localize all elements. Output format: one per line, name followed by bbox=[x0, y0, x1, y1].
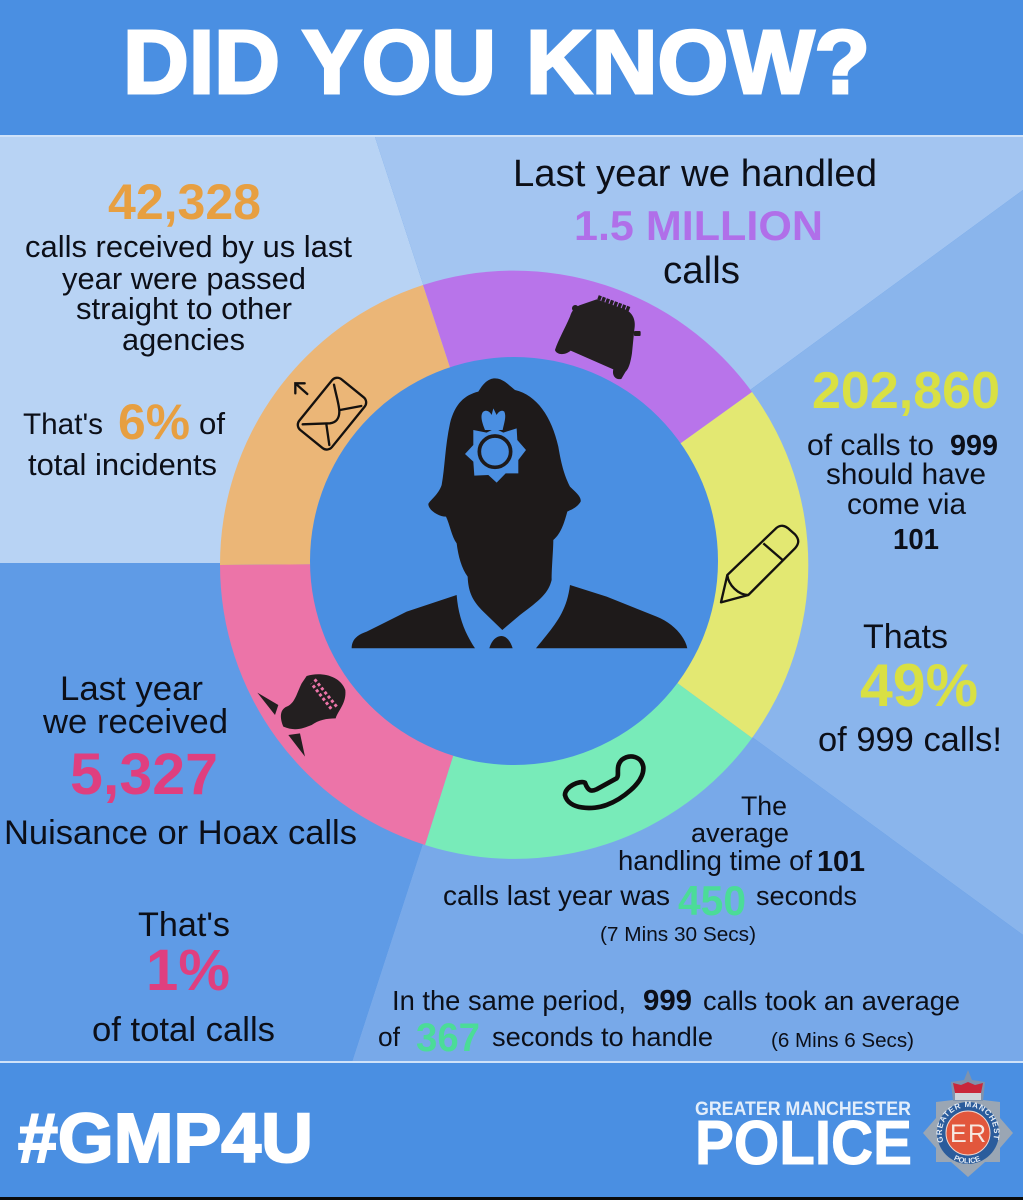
panel: calls handled background bbox=[375, 137, 1023, 563]
stat: 202,860: 202,860 bbox=[812, 362, 1000, 420]
logo wordmark: POLICE bbox=[695, 1109, 912, 1178]
text: calls handled: Last year we handled bbox=[513, 153, 877, 195]
logo: police crest: GREATER MANCHESTER bbox=[936, 1102, 1000, 1142]
text: passed to other agencies: agencies bbox=[122, 322, 245, 357]
text: passed to other agencies: total incidents bbox=[28, 447, 217, 482]
text: handling times: In the same period, bbox=[392, 985, 626, 1016]
text: handling times bbox=[378, 791, 960, 1060]
text: handling times: handling time of bbox=[618, 845, 812, 876]
text: 999 calls: come via bbox=[847, 488, 966, 521]
title: KNOW? bbox=[526, 13, 870, 113]
hashtag: #GMP4U bbox=[18, 1099, 313, 1177]
text: 999 calls: 999 bbox=[950, 430, 998, 462]
icon: police officer silhouette bbox=[352, 378, 687, 648]
ring segment: pink bbox=[220, 563, 514, 845]
title: DID bbox=[123, 13, 280, 113]
text: handling times: average bbox=[691, 818, 789, 848]
ring chart bbox=[220, 271, 808, 859]
text: handling times: 101 bbox=[817, 846, 865, 878]
ring segment: orange bbox=[220, 285, 514, 565]
text: handling times: (6 Mins 6 Secs) bbox=[771, 1029, 914, 1052]
centre circle bbox=[310, 357, 718, 765]
logo: police crest: E bbox=[950, 1120, 967, 1148]
logo wordmark: GREATER MANCHESTER bbox=[695, 1099, 911, 1120]
text: handling times: The bbox=[741, 791, 787, 821]
stat: 5,327: 5,327 bbox=[70, 742, 218, 807]
text: nuisance calls: we received bbox=[42, 703, 228, 741]
icon: envelope bbox=[295, 375, 369, 452]
text: passed to other agencies: calls received by us last bbox=[25, 229, 352, 264]
text: calls handled bbox=[513, 153, 877, 292]
text: handling times: seconds bbox=[756, 881, 857, 911]
text: nuisance calls: Last year bbox=[60, 670, 203, 708]
text: nuisance calls: of total calls bbox=[92, 1011, 275, 1049]
logo: police crest: POLICE bbox=[954, 1155, 980, 1164]
text: handling times: of bbox=[378, 1022, 400, 1052]
icon: pencil bbox=[721, 526, 798, 602]
icon: police car bbox=[555, 297, 641, 379]
text: 999 calls bbox=[807, 362, 1002, 759]
text: nuisance calls bbox=[4, 670, 357, 1049]
text: handling times: 999 bbox=[643, 985, 692, 1017]
panel: nuisance calls background bbox=[0, 563, 514, 1062]
stat: 367 seconds: 367 bbox=[416, 1016, 480, 1060]
title bbox=[123, 13, 870, 113]
stat: 1%: 1% bbox=[146, 938, 230, 1003]
text: passed to other agencies: straight to other bbox=[76, 291, 292, 326]
ring segment: purple bbox=[423, 271, 752, 563]
text: calls handled: calls bbox=[663, 250, 740, 292]
header band bbox=[0, 0, 1023, 135]
text: passed to other agencies: of bbox=[199, 406, 225, 441]
text: handling times: calls took an average bbox=[703, 985, 960, 1016]
stat: 450 seconds: 450 bbox=[678, 877, 746, 924]
logo: police crest: R bbox=[968, 1120, 986, 1148]
text: 999 calls: of calls to bbox=[807, 429, 934, 462]
ring segment: yellow bbox=[514, 392, 808, 738]
footer band bbox=[0, 1061, 1023, 1200]
panel: other agencies background bbox=[0, 137, 514, 563]
stat: 42,328: 42,328 bbox=[108, 174, 261, 230]
text: passed to other agencies: 6% bbox=[118, 394, 190, 450]
text: passed to other agencies bbox=[23, 174, 352, 482]
panel: 999 calls background bbox=[514, 190, 1023, 935]
text: nuisance calls: Nuisance or Hoax calls bbox=[4, 814, 357, 852]
text: nuisance calls: That's bbox=[138, 906, 230, 944]
text: handling times: (7 Mins 30 Secs) bbox=[600, 923, 756, 946]
title: YOU bbox=[302, 13, 496, 113]
panel: handling time background bbox=[352, 563, 1023, 1062]
text: 999 calls: of 999 calls! bbox=[818, 721, 1002, 759]
text: 999 calls: 101 bbox=[893, 524, 939, 556]
stat: 1.5 million: 1.5 MILLION bbox=[574, 202, 823, 249]
text: handling times: calls last year was bbox=[443, 880, 670, 911]
stat: 49%: 49% bbox=[860, 652, 978, 719]
text: passed to other agencies: That's bbox=[23, 408, 103, 441]
text: handling times: seconds to handle bbox=[492, 1021, 713, 1052]
text: passed to other agencies: year were passed bbox=[62, 261, 306, 296]
text: 999 calls: Thats bbox=[863, 618, 948, 656]
text: 999 calls: should have bbox=[826, 458, 986, 491]
icon: police hat with wings bbox=[257, 674, 345, 757]
icon: telephone handset bbox=[565, 757, 643, 808]
ring segment: green bbox=[425, 563, 752, 859]
